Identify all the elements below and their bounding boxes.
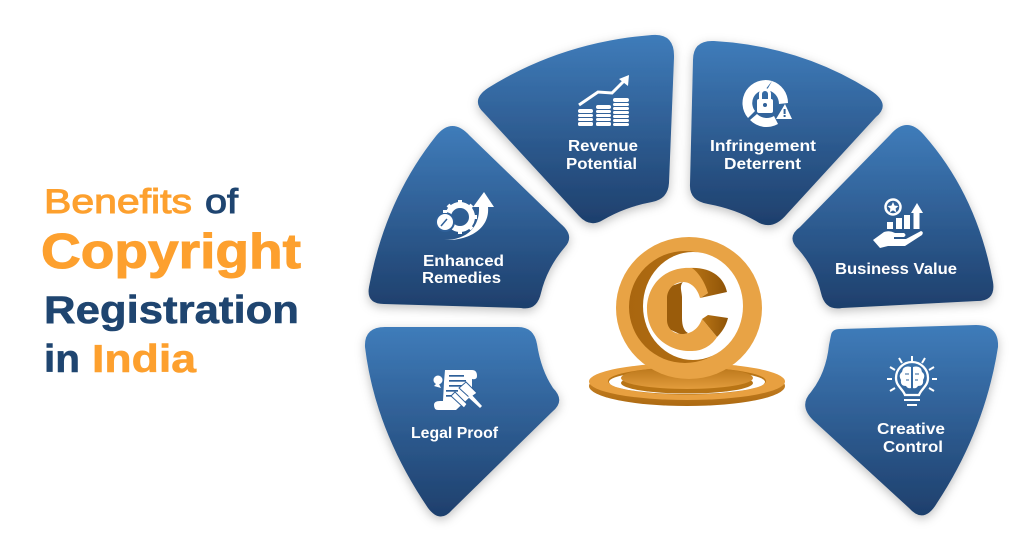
panel: revenue potential bbox=[478, 35, 674, 223]
panel: enhanced remedies bbox=[369, 126, 569, 308]
label: creative control: Creative bbox=[877, 421, 945, 438]
icon: coins and rising arrow bbox=[578, 75, 629, 126]
panel: creative control bbox=[805, 325, 998, 515]
title bbox=[41, 183, 301, 381]
title: Registration bbox=[44, 289, 299, 332]
central copyright emblem bbox=[589, 237, 785, 406]
label: revenue potential: Potential bbox=[566, 156, 637, 173]
title: Copyright bbox=[41, 225, 301, 279]
panel: legal proof bbox=[365, 327, 559, 517]
label: enhanced remedies: Enhanced bbox=[423, 253, 504, 270]
panel: infringement deterrent bbox=[690, 41, 883, 225]
title: of bbox=[205, 183, 239, 221]
title: India bbox=[92, 338, 196, 381]
icon: light bulb with brain bbox=[887, 356, 937, 405]
letter C bbox=[647, 268, 728, 351]
pedestal bbox=[589, 363, 785, 406]
title: Benefits bbox=[44, 183, 192, 221]
label: business value: Business Value bbox=[835, 261, 957, 278]
title: in bbox=[44, 338, 80, 381]
label: enhanced remedies: Remedies bbox=[422, 270, 501, 287]
label: infringement deterrent: Infringement bbox=[710, 138, 816, 155]
icon: scroll and gavel bbox=[434, 370, 482, 410]
label: revenue potential: Revenue bbox=[568, 138, 638, 155]
panel: business value bbox=[792, 125, 993, 308]
label: infringement deterrent: Deterrent bbox=[724, 156, 801, 173]
icon: lock with warning bbox=[742, 80, 792, 127]
icon: stopwatch gear and arrow bbox=[435, 192, 494, 240]
copyright ring bbox=[616, 237, 762, 379]
icon: hand with star and bars bbox=[873, 200, 923, 248]
label: legal proof: Legal Proof bbox=[411, 425, 499, 442]
label: creative control: Control bbox=[883, 439, 943, 456]
